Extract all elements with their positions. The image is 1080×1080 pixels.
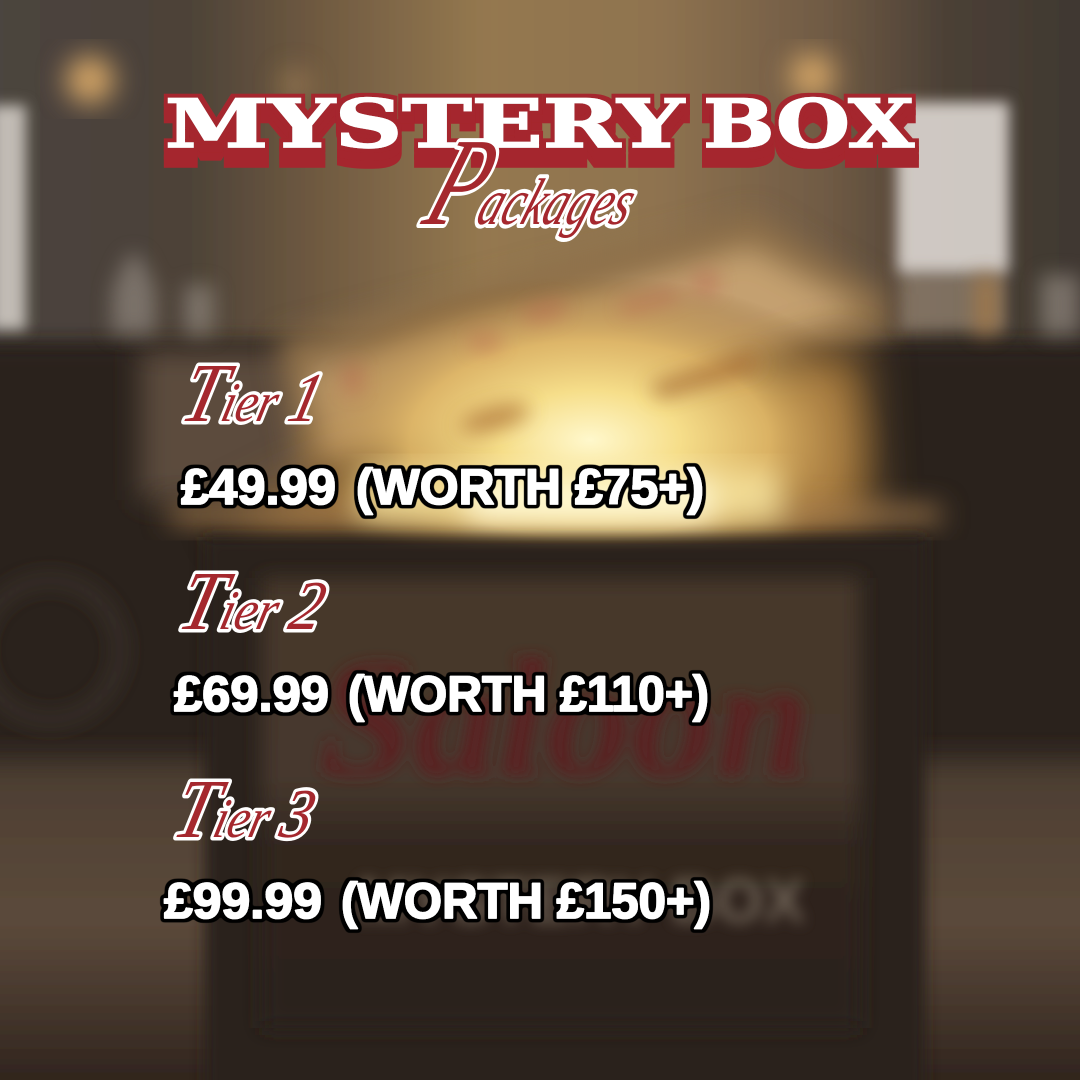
floor bbox=[0, 760, 1080, 1080]
hanging lamps bbox=[66, 54, 834, 104]
tier 2 price: (WORTH £110+) bbox=[348, 666, 709, 722]
heading: MYSTERY BOX: BOX bbox=[703, 85, 915, 163]
heading: MYSTERY BOX bbox=[165, 85, 915, 163]
back wall bbox=[0, 0, 1080, 345]
tier 1 label: Tier 1 bbox=[173, 347, 334, 440]
tier 1 price: £49.99 bbox=[181, 459, 336, 515]
heading: MYSTERY BOX: MYSTERY bbox=[165, 85, 685, 163]
lip of chest glowing bbox=[170, 470, 940, 524]
tier 3 price bbox=[164, 873, 711, 929]
orange shadow streaks bbox=[457, 352, 760, 438]
tier 2 label: Tier 2 bbox=[170, 555, 336, 648]
tier 1 price bbox=[181, 459, 704, 515]
tier 3 price: (WORTH £150+) bbox=[341, 873, 711, 929]
open chest lid bbox=[278, 215, 885, 475]
bottles on shelf bbox=[112, 255, 1080, 335]
heading: Packages script: Packages bbox=[409, 113, 666, 251]
chest body bbox=[205, 537, 925, 1080]
windows bbox=[0, 102, 1009, 330]
faint red lettering on lid bbox=[345, 272, 717, 393]
tier 1 price: (WORTH £75+) bbox=[356, 459, 704, 515]
tier 2 price: £69.99 bbox=[174, 666, 329, 722]
tier 3 price: £99.99 bbox=[164, 873, 322, 929]
opening below lid bbox=[220, 345, 870, 525]
central glow bbox=[290, 275, 890, 605]
chest inner panel bbox=[262, 578, 860, 1028]
tier 2 price bbox=[174, 666, 709, 722]
area behind tier 1 bbox=[140, 350, 320, 500]
wagon wheel bbox=[0, 580, 120, 720]
tier 3 label: Tier 3 bbox=[165, 763, 326, 856]
blurred chest logo: Saloon bbox=[319, 624, 811, 812]
counter and dark lower wall bbox=[0, 345, 1080, 760]
blurred chest caption: MYSTERY BOX bbox=[357, 867, 805, 936]
